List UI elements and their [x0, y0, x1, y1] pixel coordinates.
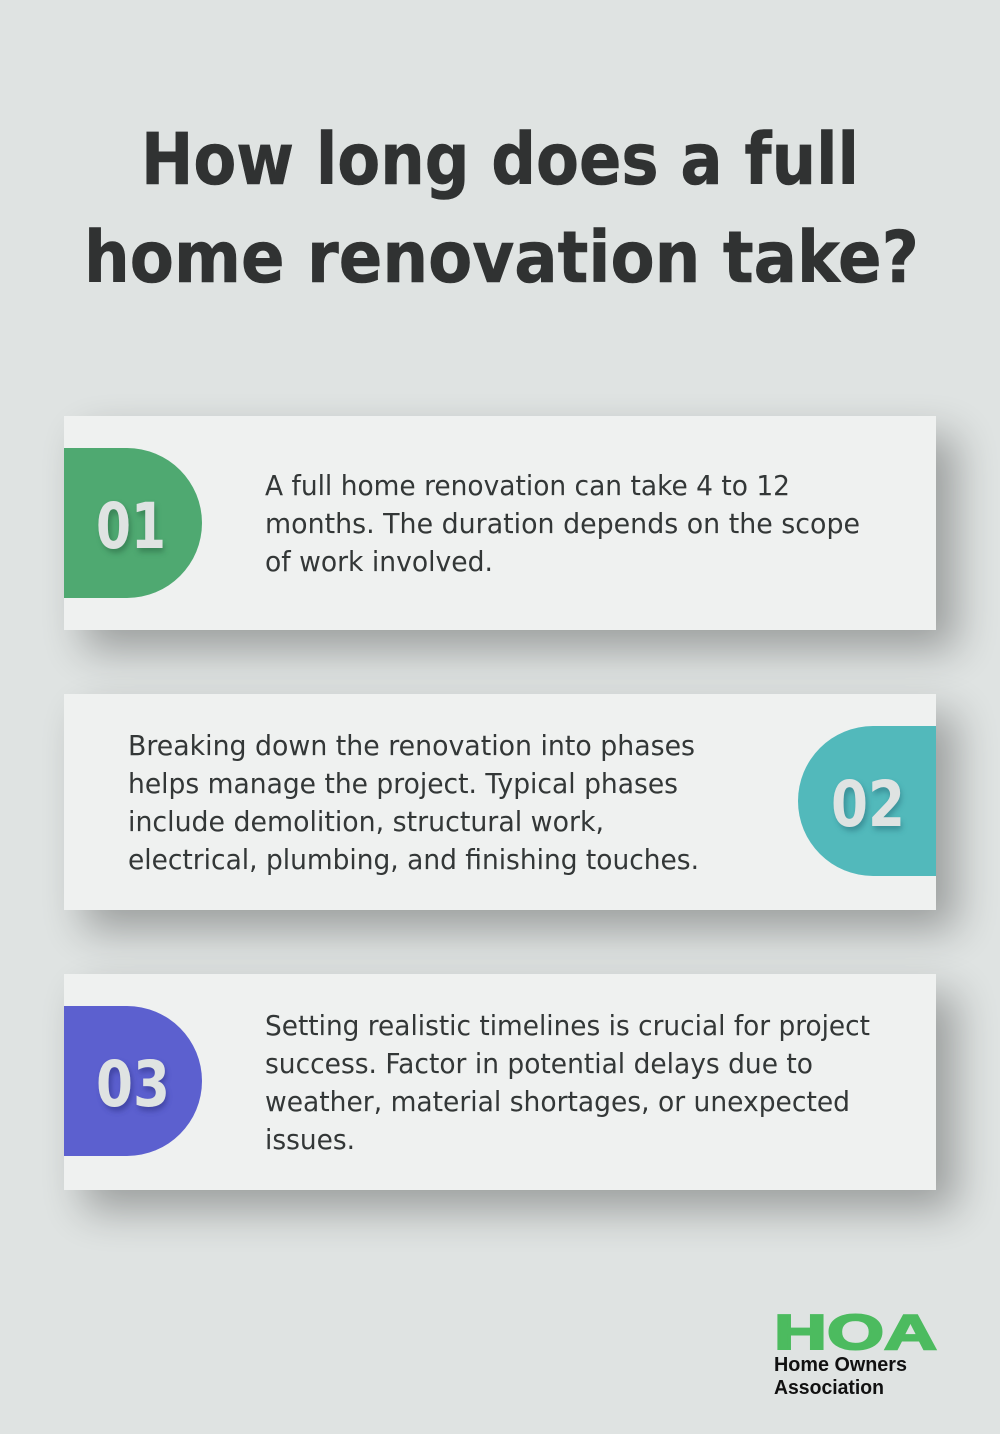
text: step 02: include demolition, structural work,	[128, 805, 604, 838]
text: step 03	[265, 1009, 870, 1156]
badge: 01: 01	[99, 494, 167, 567]
panel: step 03	[64, 974, 956, 1210]
text: step 01	[265, 469, 860, 578]
badge: 01	[64, 448, 202, 598]
text: step 03: issues.	[265, 1123, 355, 1156]
text: step 01: of work involved.	[265, 545, 493, 578]
badge: 01: 01	[96, 490, 166, 563]
text: step 03: Setting realistic timelines is crucial for project	[265, 1009, 870, 1042]
logo: HOA: Home Owners	[774, 1354, 907, 1376]
text: step 02	[128, 729, 699, 876]
text: step 03: success. Factor in potential delays due to	[265, 1047, 813, 1080]
text: step 02: helps manage the project. Typical phases	[128, 767, 678, 800]
badge: 02: 02	[831, 768, 905, 841]
panel: step 02	[64, 694, 956, 930]
text: step 02: Breaking down the renovation into phases	[128, 729, 695, 762]
title	[84, 118, 919, 299]
badge: 02	[798, 726, 936, 876]
badge: 03: 03	[96, 1048, 170, 1121]
logo: HOA: Association	[774, 1377, 884, 1399]
panel: step 01	[64, 416, 956, 650]
title: home renovation take?	[84, 216, 919, 299]
text: step 03: weather, material shortages, or unexpected	[265, 1085, 850, 1118]
badge: 02: 02	[834, 772, 906, 845]
text: step 01: A full home renovation can take 4 to 12	[265, 469, 790, 502]
text: step 01: months. The duration depends on the scope	[265, 507, 860, 540]
title: How long does a full	[141, 118, 859, 201]
badge: 03	[64, 1006, 202, 1156]
text: step 02: electrical, plumbing, and finishing touches.	[128, 843, 699, 876]
logo: HOA: HOA	[774, 1306, 937, 1360]
badge: 03: 03	[99, 1052, 171, 1125]
logo: HOA	[774, 1306, 937, 1399]
